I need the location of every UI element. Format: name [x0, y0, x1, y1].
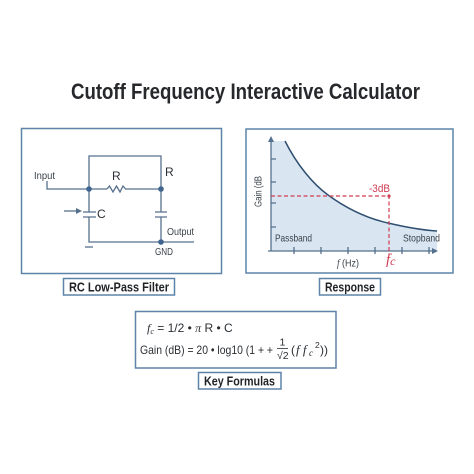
input arrow [64, 208, 82, 214]
formula: cutoff frequency: c [150, 327, 154, 336]
cutoff point [387, 194, 391, 198]
axes with ticks [268, 136, 438, 254]
circuit labels [34, 165, 194, 258]
formula: cutoff frequency: f [147, 321, 152, 335]
response curve [285, 141, 437, 231]
label: Key Formulas: Key Formulas [204, 374, 275, 388]
panel: RC low-pass filter circuit [22, 128, 222, 274]
formula: cutoff frequency: π R • C [195, 321, 233, 335]
label: Response: Response [325, 280, 375, 294]
circuit labels: C [97, 207, 106, 221]
formula: gain: ( [291, 343, 295, 357]
panel: frequency response chart [246, 129, 453, 273]
formula: gain: c [309, 348, 313, 358]
formula: gain: √2 [277, 350, 289, 362]
capacitor: output [155, 212, 167, 217]
formula: gain: )) [320, 343, 328, 357]
label: Stopband: Stopband [403, 232, 440, 244]
formula: gain: 2 [315, 340, 320, 350]
circuit labels: R [165, 165, 174, 179]
formula: gain [140, 336, 328, 362]
circuit labels: GND [155, 246, 173, 258]
resistor [107, 186, 126, 192]
y axis label: Gain (dB [252, 176, 264, 207]
formula: gain: Gain (dB) = 20 • log10 (1 + + [140, 343, 273, 357]
label: Passband: Passband [275, 232, 312, 244]
ground mark [85, 246, 93, 248]
circuit wires [47, 156, 194, 242]
label: -3dB: -3dB [369, 183, 390, 195]
formula: cutoff frequency: = 1/2 • [154, 321, 195, 335]
label: cutoff frequency: f [386, 252, 390, 268]
circuit nodes [86, 186, 164, 245]
circuit labels: Output [167, 226, 194, 238]
capacitor: C [83, 212, 96, 217]
cutoff dashed guides [271, 196, 389, 255]
formula: gain: f f [296, 342, 309, 357]
circuit labels: R [112, 169, 121, 183]
formula: gain: 1 [280, 336, 286, 348]
label: RC Low-Pass Filter: RC Low-Pass Filter [69, 280, 169, 294]
panel: key formulas [136, 312, 336, 368]
passband fill under curve [271, 141, 437, 251]
circuit labels: Input [34, 170, 55, 182]
label: cutoff frequency: c [390, 254, 396, 268]
x axis label: f (Hz) [337, 258, 359, 270]
